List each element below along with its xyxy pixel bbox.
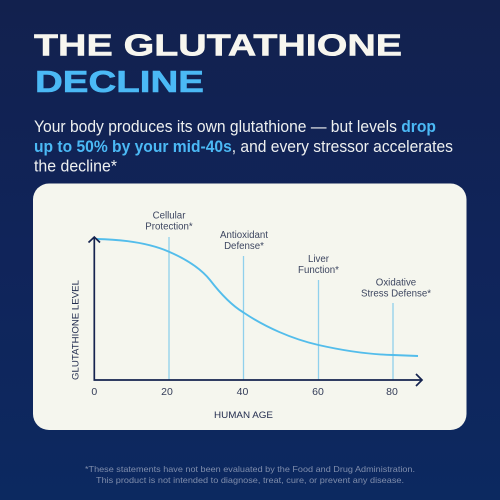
intro text: up to 50% by your mid-40s, and every stressor accelerates [34, 137, 453, 156]
x axis tick labels: 20 [161, 386, 173, 398]
callout labels: Function* [298, 265, 339, 276]
reference lines [169, 237, 393, 380]
callout labels: Liver [308, 254, 330, 265]
callout labels [145, 210, 431, 300]
title: DECLINE [35, 64, 204, 99]
x axis tick labels [91, 386, 398, 398]
callout labels: Cellular [153, 210, 186, 222]
y axis title: GLUTATHIONE LEVEL [70, 280, 82, 380]
callout labels: Oxidative [376, 278, 416, 288]
callout labels: Stress Defense* [361, 288, 431, 300]
axes [88, 237, 422, 386]
x axis title: HUMAN AGE [214, 410, 273, 421]
title: THE GLUTATHIONE [34, 28, 402, 62]
panel: chart card [33, 184, 466, 430]
callout labels: Antioxidant [220, 230, 268, 241]
disclaimer: *These statements have not been evaluated by the Food and Drug Administration. [85, 464, 415, 474]
title [34, 28, 402, 99]
x axis tick labels: 60 [312, 386, 324, 398]
x axis tick labels: 40 [237, 386, 248, 398]
callout labels: Defense* [224, 241, 264, 252]
x axis tick labels: 0 [91, 386, 97, 398]
disclaimer [85, 464, 415, 485]
intro text: the decline* [34, 156, 117, 176]
x axis tick labels: 80 [386, 386, 398, 398]
disclaimer: This product is not intended to diagnose, treat, cure, or prevent any disease. [96, 475, 404, 485]
intro text: Your body produces its own glutathione — but levels drop [34, 117, 436, 136]
callout labels: Protection* [145, 222, 193, 232]
decline curve [96, 239, 418, 356]
intro text [34, 117, 453, 176]
